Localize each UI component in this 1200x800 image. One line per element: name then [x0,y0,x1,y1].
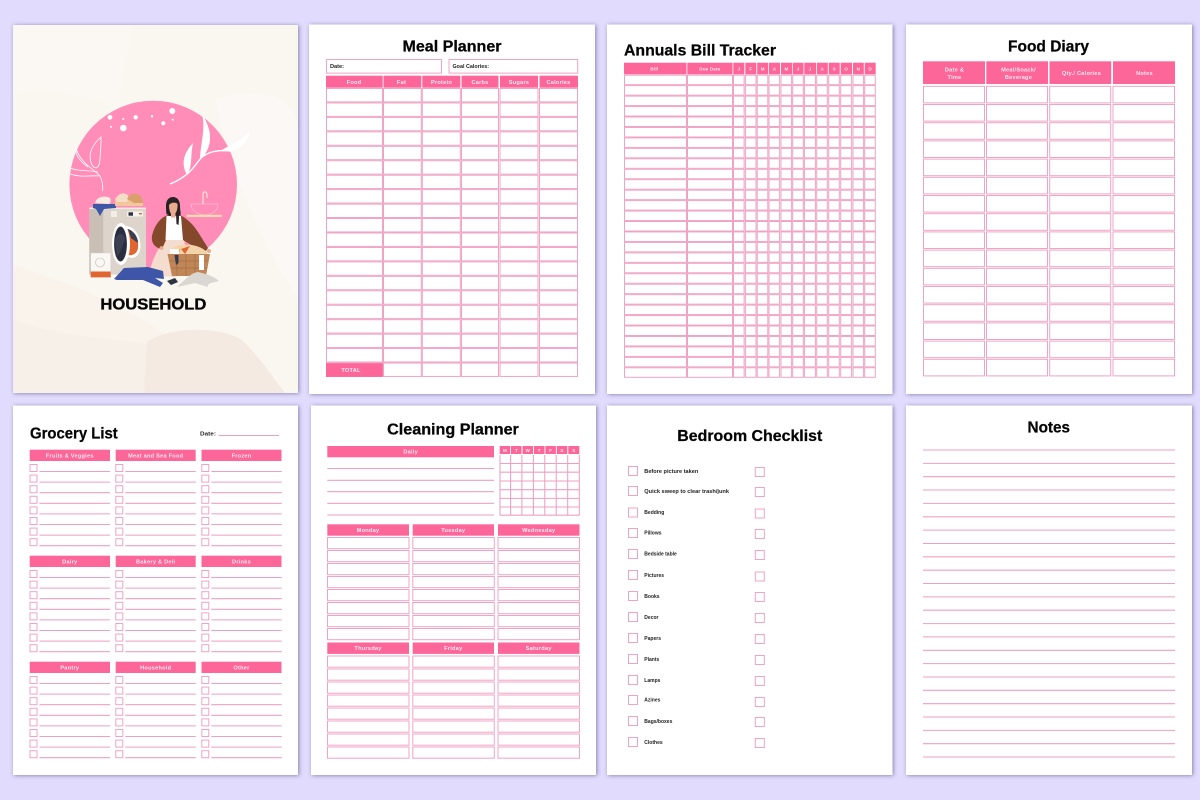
panel: food diary [906,24,1192,394]
food diary header [923,61,1175,84]
bill table header: A [773,66,777,71]
weekly mini grid: T [515,448,518,453]
meal table rows [326,88,578,376]
panel: household cover [13,25,298,393]
checklist labels: Pillows [644,530,662,536]
panel: annual bill tracker [607,24,892,394]
bill table header: J [797,66,800,71]
food diary title: Food Diary [1008,39,1089,56]
weekly mini grid: F [549,448,552,453]
grocery title: Grocery List [30,425,118,442]
grocery section headers: Drinks [232,559,251,565]
weekly mini grid: S [572,448,575,453]
checklist labels: Clothes [644,740,663,746]
food diary header: Notes [1136,71,1153,77]
weekday headers first row: Monday [357,528,380,534]
date and goal fields [326,60,578,73]
bill table rows [624,75,875,377]
bill table header: A [821,66,825,71]
checklist labels: Papers [644,636,661,642]
woman [149,197,211,277]
grocery checklist items [30,464,282,758]
washing machine [89,208,146,274]
bill table header: J [809,66,812,71]
meal table header: Food [347,80,362,86]
notes lines [923,450,1175,757]
bill tracker title: Annuals Bill Tracker [624,43,776,60]
weekday headers second row [327,642,580,654]
weekday headers first row: Wednesday [522,528,556,534]
checklist labels: Before picture taken [644,469,698,475]
detergent box [91,253,111,277]
grocery section headers: Household [140,665,172,671]
checklist labels: Quick sweep to clear trash/junk [644,489,729,495]
meal table header: Carbs [471,80,489,86]
cover background texture [144,330,285,393]
bill table header: M [761,66,765,71]
total cell: TOTAL [341,368,361,374]
weekday headers second row: Friday [444,646,463,652]
bill table header [624,63,876,74]
bill table header: M [785,66,789,71]
checklist labels: Bedside table [644,552,677,558]
grocery section headers: Pantry [60,665,80,671]
right checkboxes [755,468,764,748]
panel: grocery list [13,406,298,775]
meal table header: Sugars [509,80,529,86]
checklist labels: Azines [644,698,661,704]
laundry on washer [93,193,143,216]
weekly mini grid [500,446,579,515]
grocery section headers: Bakery & Deli [136,559,176,565]
date and goal fields: Date: [330,64,344,70]
meal table header [326,76,578,88]
total cell [326,363,383,377]
weekly mini grid: W [526,448,531,453]
food diary header: Qty./ Calories [1062,71,1101,77]
grocery section headers [30,450,282,673]
panel: bedroom checklist [607,406,892,775]
weekly mini grid: M [503,448,507,453]
daily lines [327,468,494,515]
panel: notes [906,406,1192,775]
daily header: Daily [403,450,419,456]
checklist labels: Plants [644,657,660,663]
panel: meal planner [309,24,595,394]
left checkboxes [628,466,638,746]
white dots [108,108,175,131]
weekly mini grid: T [538,448,541,453]
food diary header: Beverage [1005,75,1032,81]
folded clothes [114,267,219,287]
checklist labels: Bags/boxes [644,719,673,725]
bill table header: S [833,66,836,71]
grocery date field: Date: [200,432,216,438]
food diary header: Time [948,75,961,81]
food diary rows [924,86,1174,376]
grocery section headers: Other [233,665,250,671]
grocery section headers: Fruits & Veggies [46,453,94,459]
cleaning title: Cleaning Planner [387,421,519,438]
grocery section headers: Meat and Sea Food [128,453,184,459]
grocery section headers: Dairy [62,559,78,565]
outline leaf [70,137,103,191]
bill table header: O [844,66,848,71]
food diary header: Date & [945,68,964,74]
weekday boxes second row [328,656,580,758]
weekday headers second row: Saturday [526,646,552,652]
bill table header: D [868,66,872,71]
checklist labels: Books [644,594,660,600]
checklist labels: Pictures [644,573,664,579]
weekday boxes first row [328,538,580,640]
meal planner title: Meal Planner [402,38,502,56]
notes title: Notes [1028,419,1070,436]
food diary header: Meal/Snack/ [1001,68,1036,74]
grocery date field [200,432,279,438]
meal table header: Fat [397,80,406,86]
checklist labels [644,469,729,746]
meal table header: Protein [431,80,452,86]
bill table header: J [737,66,740,71]
date and goal fields: Goal Calories: [452,64,489,70]
pink circle [69,101,237,268]
sink icon [187,192,222,217]
white leaf branch [170,114,250,184]
weekly mini grid: S [560,448,564,453]
weekday headers first row: Tuesday [441,528,466,534]
panel: cleaning planner [311,406,596,775]
checklist labels: Lamps [644,678,661,684]
grocery section headers: Frozen [232,453,252,459]
laundry basket [168,245,210,276]
bill table header: F [749,66,752,71]
bill table header: Bill [650,66,658,71]
meal table header: Calories [546,80,571,86]
cover title: HOUSEHOLD [100,296,206,314]
weekday headers first row [327,524,580,536]
weekday headers second row: Thursday [354,646,382,652]
checklist labels: Bedding [644,510,664,516]
checklist labels: Decor [644,615,659,621]
bedroom title: Bedroom Checklist [677,428,822,445]
bill table header: Due Date [699,66,721,71]
daily header [327,446,494,457]
bill table header: N [857,66,861,71]
